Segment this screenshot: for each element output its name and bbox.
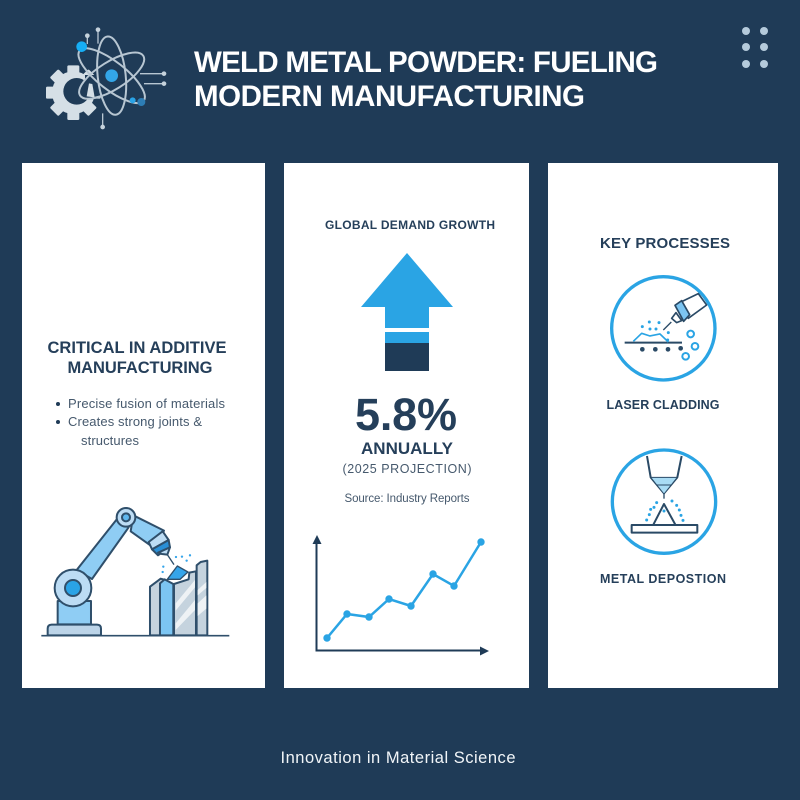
text: source: Source: Industry Reports bbox=[344, 493, 470, 505]
heading: critical in additive manufacturing bbox=[48, 339, 226, 377]
text block: bullet list bbox=[56, 396, 226, 448]
icon: metal deposition bbox=[612, 450, 716, 553]
text block: bullet list: Creates strong joints & bbox=[68, 414, 202, 429]
line chart bbox=[312, 535, 489, 656]
footer: Innovation in Material Science bbox=[280, 749, 516, 767]
panel: global demand growth bbox=[284, 163, 529, 688]
text: laser cladding: LASER CLADDING bbox=[606, 398, 720, 412]
icon: up arrow bbox=[361, 253, 453, 371]
text: annually: ANNUALLY bbox=[361, 439, 454, 458]
heading: global demand growth: GLOBAL DEMAND GROWTH bbox=[325, 218, 495, 232]
title: MODERN MANUFACTURING bbox=[194, 80, 585, 113]
icon: dot grid menu bbox=[742, 27, 768, 68]
title: WELD METAL POWDER: FUELING bbox=[194, 46, 658, 79]
statistic: 5.8 percent: 5.8% bbox=[355, 389, 457, 440]
panel: additive manufacturing bbox=[22, 163, 265, 688]
title bbox=[194, 46, 658, 113]
heading: key processes: KEY PROCESSES bbox=[600, 235, 730, 252]
text: projection: (2025 PROJECTION) bbox=[342, 462, 472, 476]
heading: critical in additive manufacturing: MANUFACTURING bbox=[68, 359, 212, 377]
icon: laser cladding bbox=[612, 277, 715, 380]
icon: gear and atom logo bbox=[46, 27, 166, 129]
text: metal deposition: METAL DEPOSTION bbox=[600, 572, 726, 586]
text block: bullet list: structures bbox=[81, 433, 140, 448]
heading: critical in additive manufacturing: CRITICAL IN ADDITIVE bbox=[48, 339, 226, 357]
panel: key processes bbox=[548, 163, 778, 688]
text block: bullet list: Precise fusion of materials bbox=[68, 396, 226, 411]
icon: robot arm welding bbox=[41, 508, 229, 636]
